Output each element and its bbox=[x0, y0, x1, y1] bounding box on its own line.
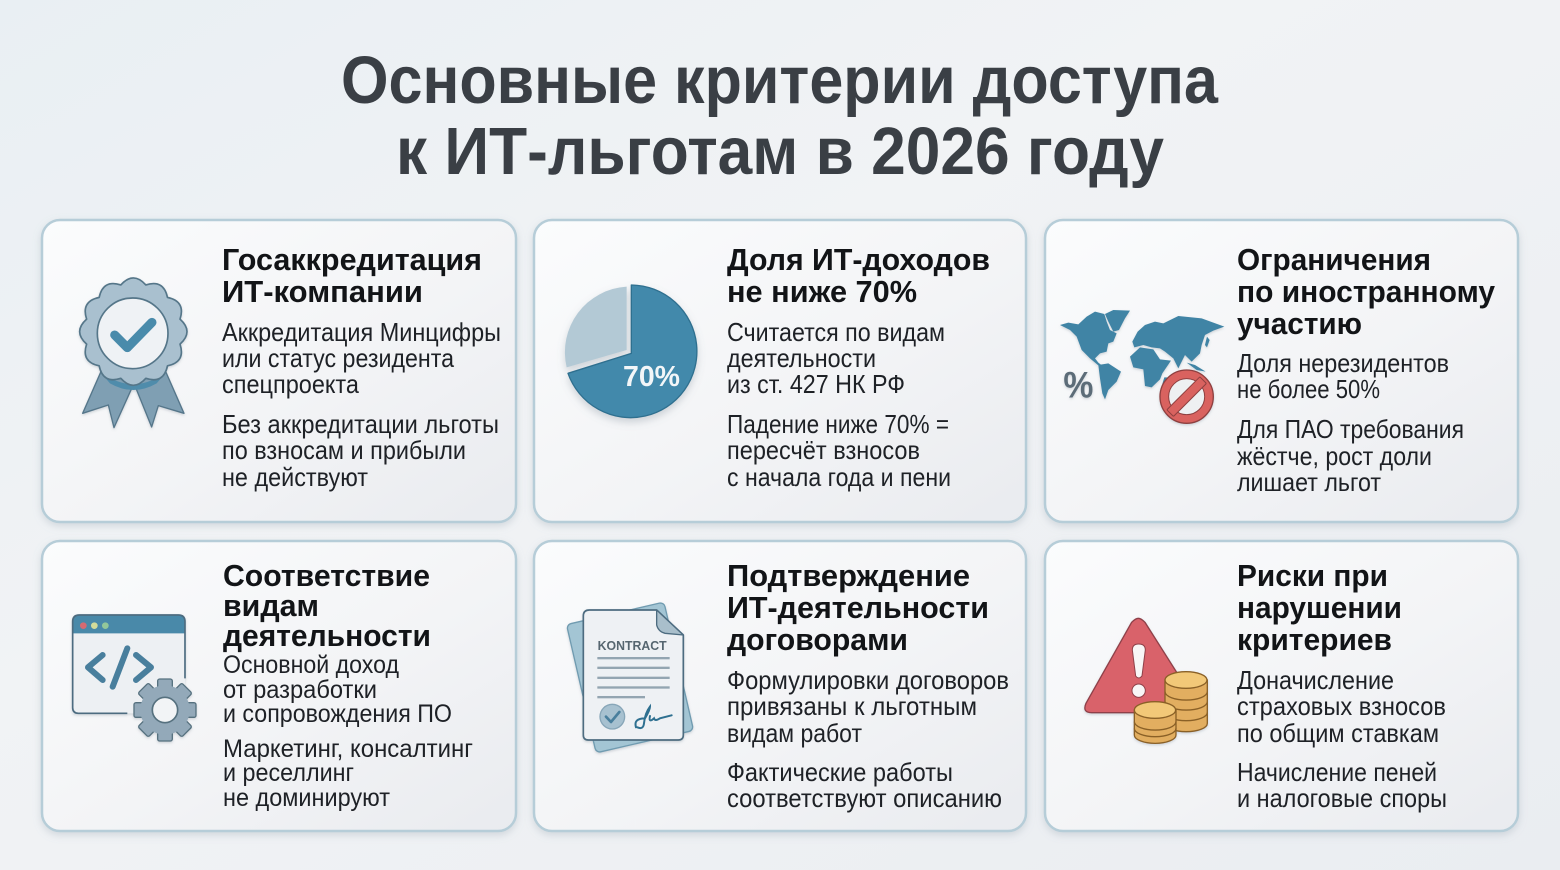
heading: foreign ownership limits bbox=[1237, 242, 1496, 341]
icon: contract document: KONTRACT bbox=[598, 639, 667, 653]
text: IT income share details bbox=[727, 317, 951, 492]
text: activity types details: не доминируют bbox=[223, 784, 391, 812]
text: violation risks details: Доначисление bbox=[1237, 665, 1394, 695]
heading: foreign ownership limits: участию bbox=[1237, 306, 1362, 341]
icon: world map with percent and prohibition sign: % bbox=[1063, 364, 1093, 405]
text: activity types details: Маркетинг, консалтинг bbox=[223, 735, 473, 763]
text: contract confirmation details: видам работ bbox=[727, 718, 862, 748]
icon: world map with percent and prohibition sign bbox=[1060, 310, 1224, 423]
text: foreign ownership details: жёстче, рост доли bbox=[1237, 441, 1432, 471]
heading: activity types: Соответствие bbox=[223, 558, 430, 593]
text: foreign ownership details: не более 50% bbox=[1237, 374, 1380, 404]
heading: IT income share bbox=[727, 242, 990, 309]
text: foreign ownership details: лишает льгот bbox=[1237, 467, 1381, 497]
heading: accreditation: ИТ-компании bbox=[222, 274, 423, 309]
text: activity types details: и сопровождения ПО bbox=[223, 700, 452, 728]
text: accreditation details: Без аккредитации льготы bbox=[222, 409, 499, 439]
text: IT income share details: деятельности bbox=[727, 343, 876, 373]
text: foreign ownership details: Для ПАО требования bbox=[1237, 414, 1464, 444]
heading: IT income share: Доля ИТ-доходов bbox=[727, 242, 990, 277]
icon: warning triangle with coins bbox=[1085, 618, 1207, 743]
text: foreign ownership details bbox=[1237, 348, 1464, 497]
text: violation risks details bbox=[1237, 665, 1447, 813]
panel: violation risks bbox=[1045, 541, 1518, 831]
panel: IT income share bbox=[534, 220, 1026, 522]
icon: pie chart 70%: 70% bbox=[623, 361, 680, 393]
text: contract confirmation details: привязаны к льготным bbox=[727, 691, 977, 721]
text: IT income share details: Падение ниже 70% = bbox=[727, 409, 949, 439]
panel: foreign ownership limits bbox=[1045, 220, 1518, 522]
title bbox=[341, 43, 1219, 189]
text: violation risks details: Начисление пеней bbox=[1237, 757, 1437, 787]
text: contract confirmation details bbox=[727, 665, 1009, 813]
heading: contract confirmation bbox=[727, 558, 989, 657]
text: IT income share details: с начала года и пени bbox=[727, 462, 951, 492]
panel: accreditation bbox=[42, 220, 516, 522]
text: accreditation details: не действуют bbox=[222, 462, 368, 492]
heading: activity types: видам bbox=[223, 588, 319, 623]
heading: violation risks bbox=[1237, 558, 1402, 657]
text: activity types details: Основной доход bbox=[223, 651, 399, 679]
heading: IT income share: не ниже 70% bbox=[727, 274, 917, 309]
heading: activity types bbox=[223, 558, 431, 653]
heading: contract confirmation: договорами bbox=[727, 622, 908, 657]
heading: violation risks: нарушении bbox=[1237, 590, 1402, 625]
heading: accreditation bbox=[222, 242, 482, 309]
text: IT income share details: Считается по видам bbox=[727, 317, 945, 347]
text: contract confirmation details: Формулировки договоров bbox=[727, 665, 1009, 695]
text: IT income share details: пересчёт взносов bbox=[727, 435, 920, 465]
heading: activity types: деятельности bbox=[223, 618, 431, 653]
heading: foreign ownership limits: Ограничения bbox=[1237, 242, 1431, 277]
text: accreditation details: спецпроекта bbox=[222, 369, 359, 399]
panel: contract confirmation bbox=[534, 541, 1026, 831]
text: contract confirmation details: Фактические работы bbox=[727, 757, 953, 787]
icon: rosette badge bbox=[80, 278, 187, 428]
text: activity types details: и реселлинг bbox=[223, 759, 354, 787]
heading: violation risks: Риски при bbox=[1237, 558, 1388, 593]
text: violation risks details: по общим ставкам bbox=[1237, 718, 1439, 748]
text: IT income share details: из ст. 427 НК РФ bbox=[727, 369, 905, 399]
heading: contract confirmation: Подтверждение bbox=[727, 558, 970, 593]
heading: contract confirmation: ИТ-деятельности bbox=[727, 590, 989, 625]
title: Основные критерии доступа bbox=[341, 43, 1219, 118]
text: accreditation details: или статус резидента bbox=[222, 343, 454, 373]
text: foreign ownership details: Доля нерезидентов bbox=[1237, 348, 1449, 378]
panel: activity types bbox=[42, 541, 516, 831]
text: contract confirmation details: соответствуют описанию bbox=[727, 783, 1002, 813]
heading: accreditation: Госаккредитация bbox=[222, 242, 482, 277]
heading: violation risks: критериев bbox=[1237, 622, 1392, 657]
icon: pie chart 70% bbox=[565, 285, 697, 418]
text: accreditation details: Аккредитация Минцифры bbox=[222, 317, 501, 347]
icon: contract document bbox=[567, 602, 694, 753]
title: к ИТ-льготам в 2026 году bbox=[396, 114, 1164, 189]
text: violation risks details: страховых взносов bbox=[1237, 691, 1446, 721]
icon: code window with gear bbox=[73, 615, 196, 741]
text: accreditation details: по взносам и прибыли bbox=[222, 435, 466, 465]
text: activity types details: от разработки bbox=[223, 676, 377, 704]
text: accreditation details bbox=[222, 317, 501, 492]
text: violation risks details: и налоговые споры bbox=[1237, 783, 1447, 813]
heading: foreign ownership limits: по иностранному bbox=[1237, 274, 1496, 309]
text: activity types details bbox=[223, 651, 473, 812]
